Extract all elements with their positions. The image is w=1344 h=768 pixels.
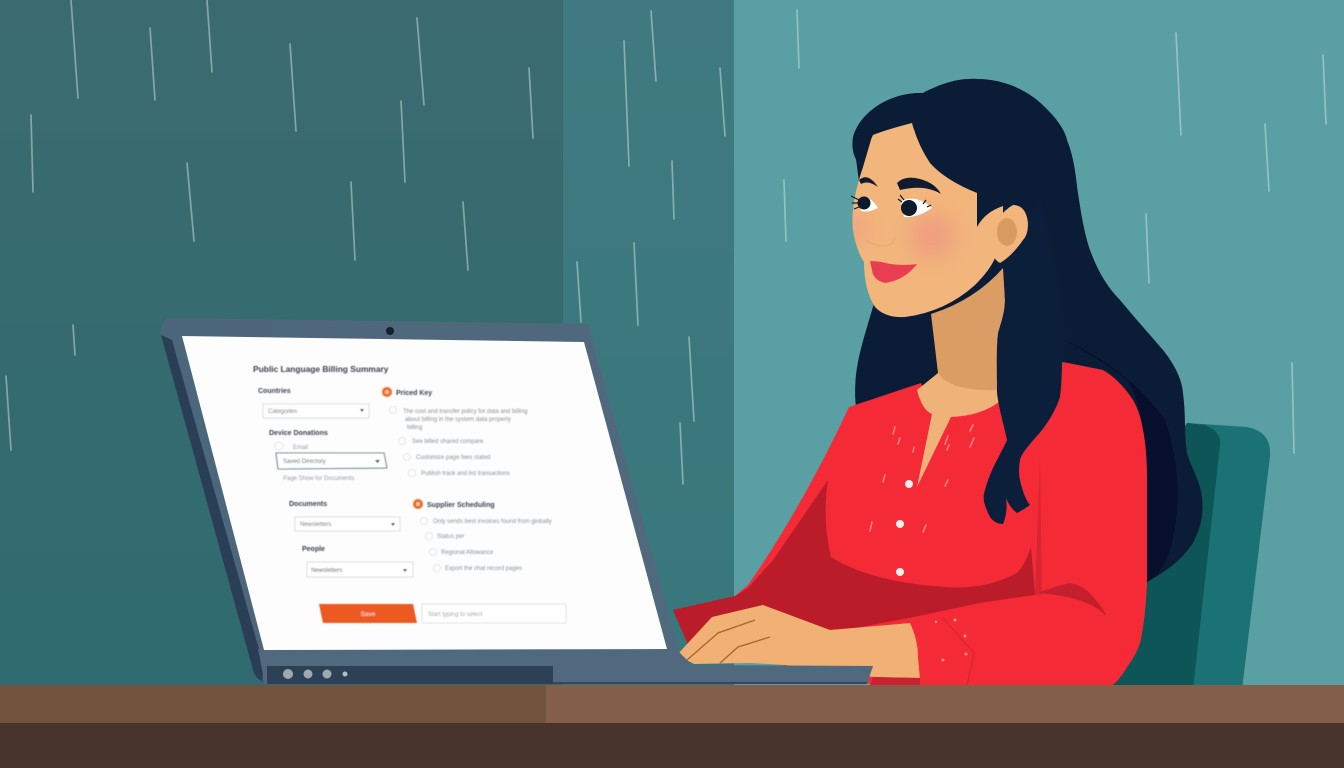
ear — [992, 205, 1028, 263]
left column fields: Categories — [268, 409, 297, 415]
desk — [0, 685, 1344, 768]
text input — [422, 604, 566, 623]
right column: priced key options: about billing in the system data properly — [405, 417, 511, 423]
fingers — [687, 620, 770, 663]
text input: Start typing to select — [428, 612, 483, 618]
blouse: side crease — [1035, 457, 1042, 595]
right column: priced key options: Publish track and list transactions — [421, 471, 510, 477]
right column: supplier scheduling options: Export the chat record pages — [445, 566, 522, 572]
laptop: screen — [182, 336, 667, 650]
hair: front strand — [984, 200, 1065, 524]
left column fields: Newsletters — [300, 522, 331, 528]
submit button — [319, 604, 417, 623]
hair: back mass — [853, 79, 1203, 582]
right column: priced key options: The cost and transfer policy for data and billing — [403, 409, 527, 415]
blush — [845, 214, 954, 258]
left column fields: Device Donations — [269, 430, 328, 437]
left column fields: Page Show for Documents — [283, 476, 354, 482]
blouse: buttons — [896, 480, 913, 576]
right column: supplier scheduling options — [413, 499, 552, 572]
right column: priced key options: Customize page fees stated — [416, 455, 490, 461]
right column: supplier scheduling options: Supplier Scheduling — [427, 502, 495, 509]
form title: Public Language Billing Summary — [253, 364, 389, 374]
laptop — [161, 318, 873, 684]
right column: supplier scheduling options: Status per — [437, 534, 464, 540]
laptop: screen bezel — [161, 318, 680, 682]
left column fields: Email — [293, 445, 308, 451]
left column fields: People — [302, 546, 325, 553]
face — [852, 122, 1030, 317]
blouse: hem under wrist — [868, 677, 920, 690]
laptop: left edge shadow — [161, 335, 268, 682]
neck collar skin — [917, 373, 1000, 487]
blouse: torso — [673, 362, 1147, 690]
right column: supplier scheduling options: Only sends best invoices found from globally — [433, 519, 552, 525]
sleeve crease — [1038, 583, 1107, 617]
right column: priced key options: billing — [407, 425, 422, 431]
laptop: camera — [386, 327, 394, 335]
right column: supplier scheduling options: Regional Allowance — [441, 550, 494, 556]
blouse: shaded underside — [673, 480, 1035, 645]
hair: darker inner stripe — [1065, 340, 1178, 582]
blouse: embroidery — [870, 425, 974, 532]
left column fields: Saved Directory — [283, 459, 326, 465]
chair — [1100, 423, 1270, 690]
nose — [866, 238, 895, 246]
hand and forearm — [677, 605, 920, 678]
submit button: Save — [361, 611, 376, 618]
blouse: sleeve — [912, 580, 1147, 690]
rain streaks — [6, 0, 1326, 484]
form on screen — [253, 364, 566, 623]
neck shadow — [931, 268, 1005, 390]
laptop: base — [258, 649, 873, 684]
left column fields — [258, 388, 413, 577]
sleeve cuff — [935, 617, 974, 685]
left column fields: Documents — [289, 501, 327, 508]
eyes — [851, 195, 932, 217]
right column: priced key options — [382, 387, 527, 477]
right column: priced key options: See billed shared compare — [412, 439, 484, 445]
right column: priced key options: Priced Key — [396, 390, 432, 397]
left column fields: Countries — [258, 388, 291, 395]
hair: front fringe — [852, 79, 1078, 300]
left column fields: Newsletters — [311, 568, 342, 574]
lips — [870, 261, 917, 283]
brows — [859, 177, 941, 194]
woman — [673, 79, 1203, 690]
